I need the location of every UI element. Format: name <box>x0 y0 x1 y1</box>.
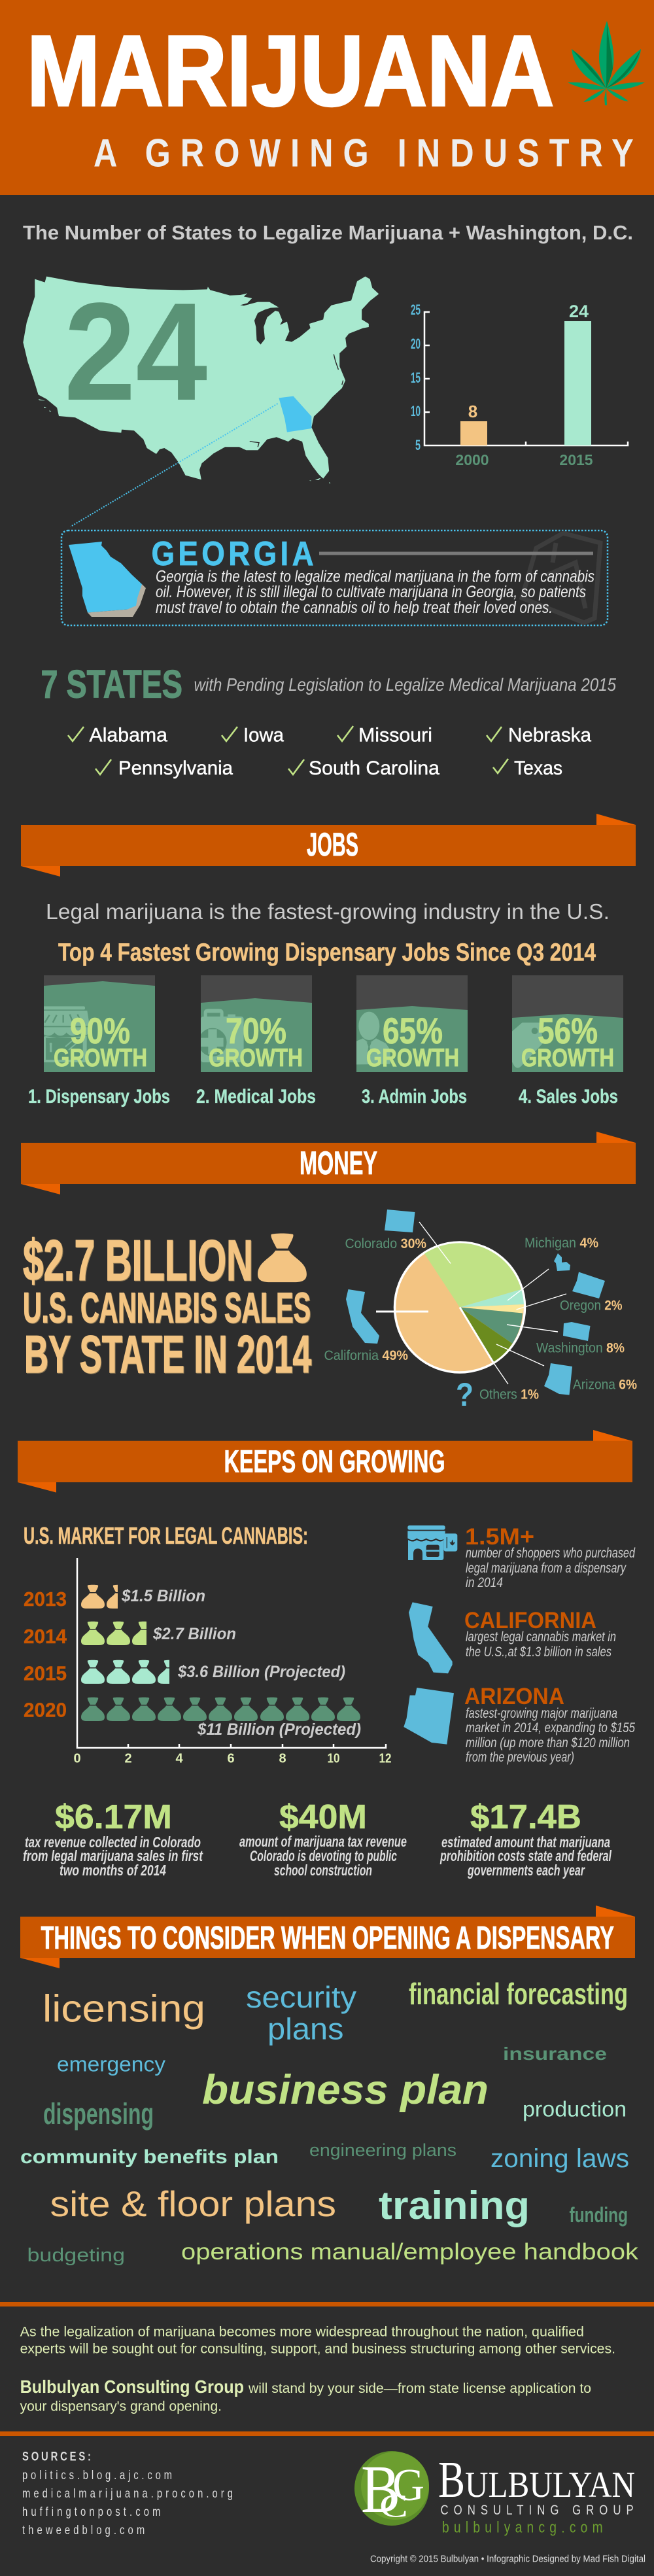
text: fastest growing industry: Legal marijuana is the fastest-growing industry in the U.S. <box>46 899 610 924</box>
headline: $2.7 billion sales: U.S. CANNABIS SALES <box>23 1284 311 1332</box>
bar 2015 <box>564 321 591 445</box>
list: pending states: South Carolina <box>309 757 439 779</box>
heading: number of states: The Number of States to Legalize Marijuana + Washington, D.C. <box>23 221 633 244</box>
bar chart: 8 <box>468 402 477 421</box>
word cloud: emergency <box>57 2053 165 2076</box>
word cloud: operations manual/employee handbook <box>181 2239 639 2265</box>
bar chart: 15 <box>411 370 421 386</box>
subtitle: A GROWING INDUSTRY <box>94 131 634 175</box>
list: pending states: Texas <box>514 757 562 779</box>
icon: price tag <box>512 1022 543 1068</box>
stat: $6.17M: two months of 2014 <box>60 1862 166 1879</box>
stat: $40M: school construction <box>274 1862 372 1879</box>
stat: $17.4B: governments each year <box>467 1862 585 1879</box>
logo: Bulbulyan Consulting Group: C <box>379 2487 408 2524</box>
pie leader lines <box>376 1222 566 1384</box>
word cloud: engineering plans <box>309 2140 456 2160</box>
pie labels: Washington 8% <box>536 1341 625 1356</box>
stat: 65% <box>383 1010 443 1051</box>
word cloud: budgeting <box>27 2245 125 2266</box>
bar 2000 <box>460 421 487 445</box>
panel: dispensary jobs 90% <box>41 975 155 1072</box>
list: pending states: Pennsylvania <box>118 757 233 779</box>
word cloud: training <box>379 2184 530 2227</box>
bar chart: 25 <box>411 302 421 318</box>
sources: SOURCES: <box>22 2450 91 2463</box>
stat: 90% <box>70 1010 130 1051</box>
big number: 24 <box>64 274 207 430</box>
panel: Arizona <box>404 1684 635 1765</box>
list: pending states: Iowa <box>243 725 284 746</box>
word cloud: business plan <box>202 2067 489 2113</box>
icon: dispensary storefront <box>407 1525 457 1560</box>
icons: state silhouettes <box>346 1210 605 1413</box>
ribbon: keeps on growing: KEEPS ON GROWING <box>224 1445 445 1480</box>
word cloud: community benefits plan <box>20 2146 279 2168</box>
panel: dispensary jobs 90%: GROWTH <box>54 1044 147 1072</box>
word cloud: insurance <box>503 2044 607 2064</box>
bar chart: 20 <box>411 336 421 352</box>
closing text panel: your dispensary's grand opening. <box>20 2399 222 2414</box>
pictogram chart: $3.6 Billion (Projected) <box>177 1663 345 1681</box>
logo: Bulbulyan Consulting Group: G <box>392 2460 424 2511</box>
word cloud <box>20 1977 639 2266</box>
stat: $6.17M <box>23 1798 203 1879</box>
list: pending states: Nebraska <box>508 725 591 746</box>
word cloud: dispensing <box>43 2097 154 2131</box>
list: pending states: Missouri <box>358 725 432 746</box>
map of the United States <box>23 274 379 483</box>
pie labels <box>324 1236 637 1402</box>
description: largest legal cannabis market in <box>466 1629 616 1645</box>
closing text panel: Bulbulyan Consulting Group <box>20 2376 244 2397</box>
closing text panel: experts will be sought out for consulting, support, and business structuring among other services. <box>20 2342 615 2357</box>
stat: $6.17M: from legal marijuana sales in first <box>23 1847 203 1864</box>
pictogram chart: 0 <box>73 1751 81 1766</box>
pictogram chart <box>24 1558 391 1766</box>
pie chart <box>395 1242 525 1372</box>
panel: admin jobs 65%: GROWTH <box>366 1044 459 1072</box>
list: pending states <box>68 725 591 779</box>
panel: medical jobs 70% <box>198 975 312 1072</box>
logo: Bulbulyan Consulting Group: ULBULYAN <box>465 2465 635 2505</box>
logo: Bulbulyan Consulting Group <box>354 2451 635 2536</box>
sources: politics.blog.ajc.com <box>22 2468 172 2482</box>
panel: Georgia callout <box>61 531 608 625</box>
panel: sales jobs 56% <box>512 975 623 1072</box>
bar chart <box>411 302 628 468</box>
panel: sales jobs 56%: GROWTH <box>521 1044 614 1072</box>
logo: Bulbulyan Consulting Group: B <box>361 2452 400 2527</box>
logo: Bulbulyan Consulting Group: CONSULTING GROUP <box>441 2503 634 2518</box>
stat: $6.17M: $6.17M <box>55 1798 172 1836</box>
icon: California <box>409 1602 453 1673</box>
pictogram chart: 12 <box>379 1751 391 1766</box>
word cloud: site & floor plans <box>50 2184 336 2224</box>
stat: $40M <box>239 1798 407 1879</box>
word cloud: production <box>523 2097 627 2121</box>
headline: $2.7 billion sales: BY STATE IN 2014 <box>24 1325 311 1384</box>
stat: $17.4B <box>439 1798 611 1879</box>
pie labels: Others 1% <box>479 1387 539 1402</box>
heading: Georgia: GEORGIA <box>152 535 314 573</box>
pie labels: Colorado 30% <box>345 1236 426 1251</box>
icons: state silhouettes: ? <box>456 1376 473 1413</box>
sources <box>22 2450 233 2537</box>
bar chart: 2015 <box>559 451 593 468</box>
stat: $40M: Colorado is devoting to public <box>250 1847 397 1864</box>
dotted connector line <box>71 404 278 527</box>
stat: ARIZONA <box>464 1684 564 1709</box>
icon: Georgia highlight <box>279 396 311 432</box>
pictogram chart: $1.5 Billion <box>121 1587 205 1605</box>
headline: $2.7 billion sales <box>23 1228 311 1384</box>
panel: medical jobs 70%: GROWTH <box>209 1044 303 1072</box>
job labels: 1. Dispensary Jobs <box>28 1086 170 1107</box>
stat: 1.5M+ <box>465 1524 534 1550</box>
pictogram chart: 4 <box>175 1751 183 1766</box>
logo: Bulbulyan Consulting Group: B <box>438 2452 465 2509</box>
heading: U.S. market: U.S. MARKET FOR LEGAL CANNABIS: <box>24 1522 308 1549</box>
stat: $17.4B: $17.4B <box>470 1798 581 1836</box>
bar chart: 5 <box>415 437 421 453</box>
list: pending states: Alabama <box>89 725 167 746</box>
header banner <box>0 0 654 195</box>
closing text panel <box>0 2302 654 2436</box>
pictogram chart: $11 Billion (Projected) <box>197 1720 361 1739</box>
icon: shop <box>41 1006 90 1062</box>
pie labels: Arizona 6% <box>573 1378 637 1393</box>
panel: admin jobs 65% <box>356 975 468 1072</box>
description <box>466 1629 616 1660</box>
heading: 7 states <box>41 663 616 706</box>
icon: medical kit <box>198 1009 244 1062</box>
closing text panel: will stand by your side—from state license application to <box>248 2381 591 2396</box>
stat: CALIFORNIA <box>464 1608 596 1633</box>
stat: 70% <box>226 1010 286 1051</box>
stat: $40M: $40M <box>279 1798 367 1836</box>
pictogram chart: 2013 <box>24 1588 67 1610</box>
pie labels: California 49% <box>324 1348 408 1363</box>
pictogram chart: 2 <box>124 1751 132 1766</box>
job labels <box>28 1086 618 1107</box>
word cloud: plans <box>267 2012 344 2046</box>
description <box>466 1706 635 1765</box>
stat: $40M: amount of marijuana tax revenue <box>239 1833 407 1850</box>
icon: Georgia state <box>69 542 146 617</box>
headline: $2.7 billion sales: $2.7 BILLION <box>23 1228 253 1293</box>
bar chart: 10 <box>411 403 421 419</box>
ribbon: things to consider <box>20 1906 635 1968</box>
description: the U.S.,at $1.3 billion in sales <box>466 1645 611 1660</box>
description <box>466 1546 636 1590</box>
sources: medicalmarijuana.procon.org <box>22 2486 233 2500</box>
word cloud: security <box>246 1980 356 2014</box>
text block: must travel to obtain the cannabis oil to help treat their loved ones. <box>156 599 553 617</box>
icon: cannabis leaf <box>568 21 645 105</box>
ribbon: keeps on growing <box>18 1430 632 1493</box>
ribbon: money: MONEY <box>300 1145 377 1181</box>
word cloud: licensing <box>43 1987 205 2030</box>
logo: Bulbulyan Consulting Group: bulbulyancg.com <box>442 2518 603 2536</box>
closing text panel: As the legalization of marijuana becomes more widespread throughout the nation, qualified <box>20 2325 584 2340</box>
stat: $6.17M: tax revenue collected in Colorado <box>25 1834 201 1851</box>
icon: person <box>356 1012 390 1064</box>
panel: California <box>409 1602 616 1673</box>
pictogram chart: 2020 <box>24 1699 67 1722</box>
sources: huffingtonpost.com <box>22 2505 160 2518</box>
icon: ghost Georgia outline <box>522 533 600 623</box>
bar chart: 2000 <box>455 451 489 468</box>
word cloud: funding <box>569 2203 628 2227</box>
pie labels: Oregon 2% <box>560 1298 623 1314</box>
pictogram chart: 6 <box>227 1751 235 1766</box>
title: MARIJUANA <box>27 15 554 127</box>
word cloud: zoning laws <box>490 2144 629 2173</box>
pie labels: Michigan 4% <box>525 1236 598 1251</box>
panel: shoppers <box>407 1524 636 1590</box>
description: from the previous year) <box>466 1750 574 1765</box>
pictogram chart: 8 <box>279 1751 286 1766</box>
sources: theweedblog.com <box>22 2523 145 2537</box>
bar chart: 24 <box>569 302 589 321</box>
pictogram chart: 2014 <box>24 1625 67 1648</box>
description: in 2014 <box>466 1575 503 1590</box>
stat: 56% <box>538 1010 598 1051</box>
pictogram chart: 2015 <box>24 1662 67 1685</box>
job labels: 2. Medical Jobs <box>196 1086 316 1107</box>
pictogram chart: $2.7 Billion <box>152 1625 236 1643</box>
ribbon: jobs: JOBS <box>307 826 358 863</box>
heading: 7 states: 7 STATES <box>41 663 182 706</box>
text block <box>156 567 594 617</box>
job labels: 4. Sales Jobs <box>519 1086 618 1107</box>
pictogram chart: 10 <box>327 1751 340 1766</box>
ribbon: jobs <box>21 814 636 877</box>
ribbon: money <box>21 1132 636 1194</box>
job labels: 3. Admin Jobs <box>362 1086 467 1107</box>
icon: Arizona <box>404 1688 454 1745</box>
icon: money bag <box>258 1233 307 1282</box>
